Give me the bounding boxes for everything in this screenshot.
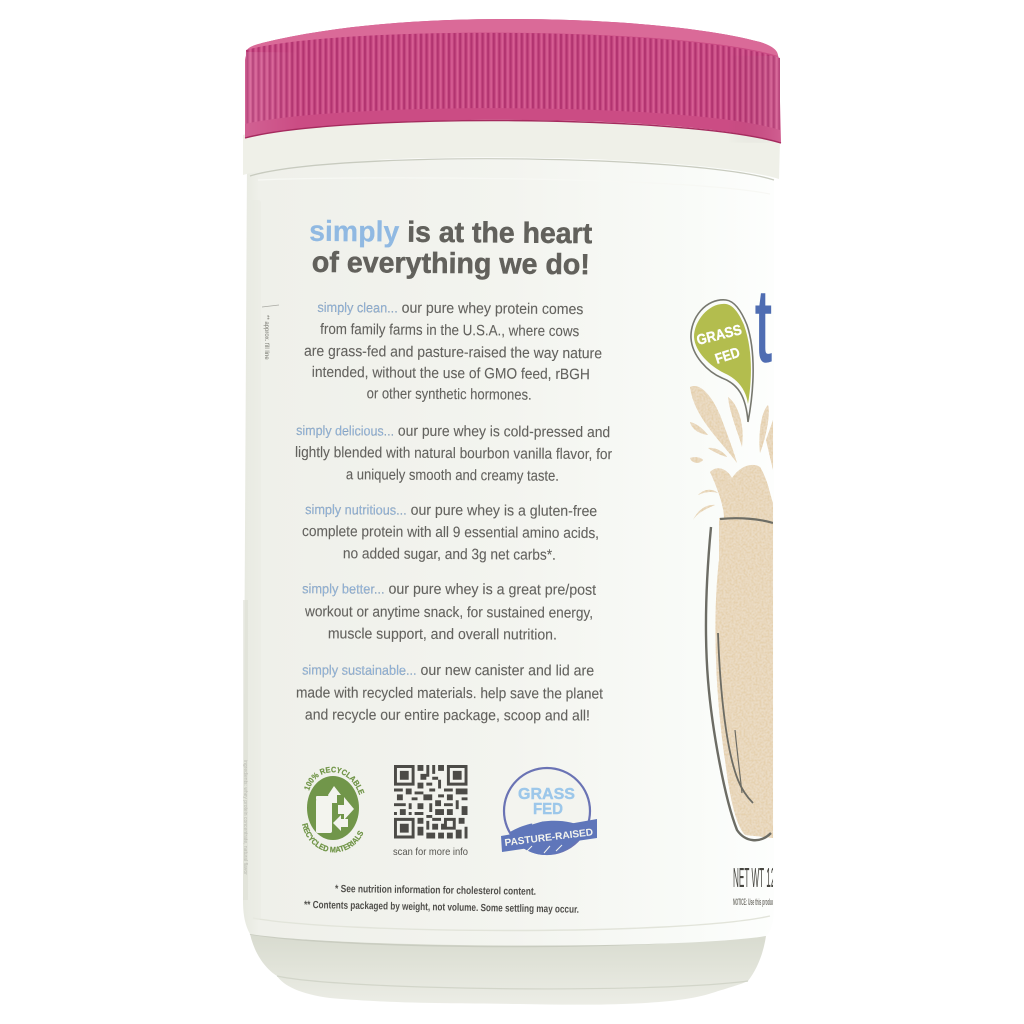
front label artwork: NOTICE: Use this product xyxy=(733,897,775,907)
paragraph: simply clean: from family farms in the U.S.A., where cows xyxy=(320,321,579,340)
speech bubble: grass fed: GRASS xyxy=(695,322,744,349)
fill line mark: ** approx. fill line xyxy=(263,315,269,360)
icon: grass fed pasture-raised badge: FED xyxy=(533,801,563,818)
footnotes: ** Contents packaged by weight, not volume. Some settling may occur. xyxy=(304,899,579,916)
paragraph: simply sustainable: made with recycled materials. help save the planet xyxy=(296,684,604,703)
paragraph: simply delicious: lightly blended with natural bourbon vanilla flavor, for xyxy=(295,444,612,463)
footnotes: * See nutrition information for cholesterol content. xyxy=(335,883,536,898)
brand letters: te xyxy=(755,268,805,384)
paragraph: simply nutritious xyxy=(302,501,599,564)
paragraph: simply sustainable: and recycle our entire package, scoop and all! xyxy=(305,706,590,724)
paragraph: simply nutritious: no added sugar, and 3g net carbs*. xyxy=(343,545,556,564)
paragraph: simply delicious: simply delicious... our pure whey is cold-pressed and xyxy=(296,422,610,441)
neck ring xyxy=(243,120,780,180)
canister body xyxy=(243,160,774,946)
canister base xyxy=(249,928,767,1005)
headline xyxy=(309,216,593,281)
icon: recyclable badge: 100% RECYCLABLE xyxy=(304,766,364,795)
paragraph: simply clean xyxy=(304,299,602,404)
side nutrition panel edge text: ingredients: whey protein concentrate, natural flavor xyxy=(242,760,248,875)
icon: grass fed pasture-raised badge xyxy=(501,768,597,855)
paragraph: simply better: muscle support, and overall nutrition. xyxy=(328,625,557,644)
QR code: scan for more info xyxy=(393,846,468,858)
paragraph: simply sustainable: simply sustainable... our new canister and lid are xyxy=(302,661,594,680)
speech bubble: grass fed: FED xyxy=(713,345,742,368)
headline: simply is at the heart xyxy=(309,216,593,250)
paragraph: simply sustainable xyxy=(296,661,604,725)
text: NET WT 12 OZ xyxy=(733,862,789,893)
paragraph: simply better xyxy=(302,580,597,644)
paragraph: simply clean: are grass-fed and pasture-raised the way nature xyxy=(304,343,602,362)
icon: recyclable badge xyxy=(302,766,364,853)
headline: of everything we do! xyxy=(312,247,590,281)
paragraph: simply delicious: a uniquely smooth and creamy taste. xyxy=(346,466,559,485)
speech bubble: grass fed xyxy=(691,300,753,422)
QR code xyxy=(393,765,468,858)
footnotes xyxy=(304,883,579,916)
paragraph: simply clean: intended, without the use of GMO feed, rBGH xyxy=(312,364,590,383)
fill line mark xyxy=(262,305,279,360)
paragraph: simply delicious xyxy=(295,422,612,485)
icon: grass fed pasture-raised badge: GRASS xyxy=(518,786,575,803)
icon: recyclable badge: RECYCLED MATERIALS xyxy=(302,823,364,853)
pink ribbed lid xyxy=(245,19,781,143)
paragraph: simply nutritious: complete protein with all 9 essential amino acids, xyxy=(302,523,599,542)
paragraph: simply better: workout or anytime snack, for sustained energy, xyxy=(304,603,593,622)
paragraph: simply clean: simply clean... our pure whey protein comes xyxy=(317,299,583,318)
icon: grass fed pasture-raised badge: PASTURE-RAISED xyxy=(504,827,594,849)
paragraph: simply clean: or other synthetic hormones. xyxy=(367,385,532,404)
splash and powder glass xyxy=(690,386,773,840)
front label artwork xyxy=(690,293,773,907)
paragraph: simply nutritious: simply nutritious... our pure whey is a gluten-free xyxy=(305,501,597,520)
paragraph: simply better: simply better... our pure whey is a great pre/post xyxy=(302,580,597,599)
